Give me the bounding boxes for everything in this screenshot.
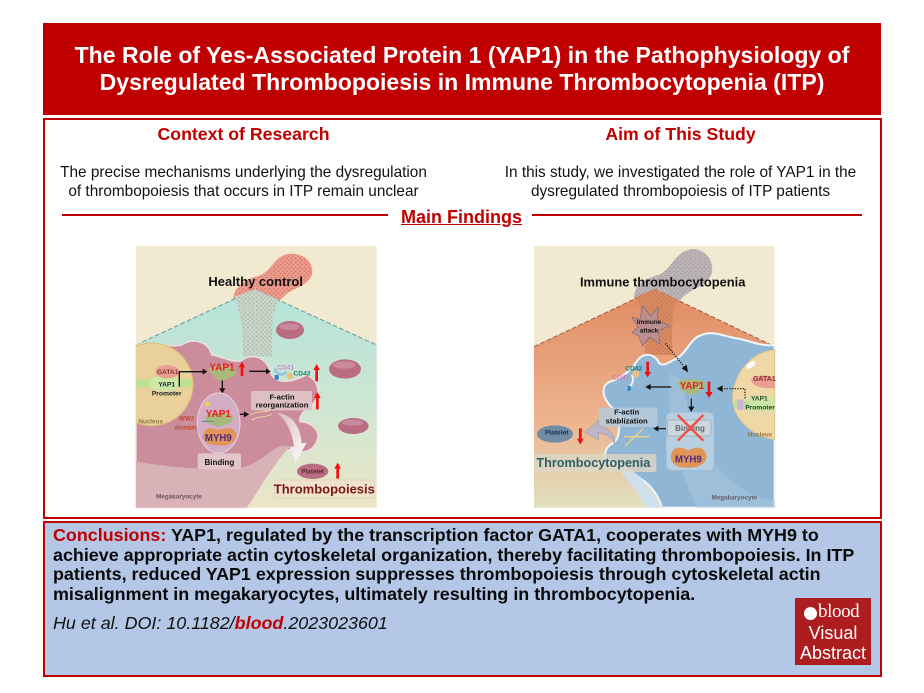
roof orange area bbox=[534, 289, 775, 508]
figure: immune thrombocytopenia diagram bbox=[534, 246, 776, 508]
arrows bbox=[179, 371, 267, 414]
megakaryocyte body bbox=[136, 341, 318, 508]
figure: healthy control diagram: WW2 bbox=[179, 415, 195, 422]
figure: immune thrombocytopenia diagram: stablization bbox=[606, 417, 648, 426]
figure: immune thrombocytopenia diagram: GATA1 bbox=[753, 376, 776, 383]
megakaryocyte blue body bbox=[604, 333, 775, 508]
promoter DNA: Promoter bbox=[152, 391, 182, 398]
figure: healthy control diagram: CD41 bbox=[277, 364, 294, 371]
figure: healthy control diagram: F-actin bbox=[269, 392, 295, 401]
logo: blood visual abstract bbox=[795, 598, 871, 665]
nucleus bbox=[733, 350, 775, 439]
arrow to platelet bbox=[585, 420, 615, 444]
figure: healthy control diagram: Megakaryocyte bbox=[156, 494, 202, 501]
heading: context of research: Context of Research bbox=[157, 124, 330, 144]
binding label bbox=[198, 453, 241, 469]
heading: main findings: Main Findings bbox=[401, 207, 522, 227]
platelets bbox=[276, 321, 369, 434]
roof teal area bbox=[136, 289, 377, 508]
logo: blood visual abstract: Abstract bbox=[800, 643, 866, 663]
text: conclusions paragraph: achieve appropriate actin cytoskeletal organization, thereby facilitating thrombopoiesis. In ITP bbox=[53, 545, 854, 565]
figure: healthy control diagram: YAP1 bbox=[206, 409, 231, 420]
figure: healthy control diagram bbox=[135, 246, 377, 508]
panel: main content frame bbox=[43, 118, 882, 519]
figure: healthy control diagram: reorganization bbox=[256, 401, 309, 410]
figure: immune thrombocytopenia diagram: Promoter bbox=[745, 404, 775, 411]
figure: immune thrombocytopenia diagram: F-actin bbox=[614, 408, 640, 417]
promoter DNA: GATA1 bbox=[157, 369, 179, 376]
platelet bbox=[297, 464, 328, 479]
thrombopoiesis label bbox=[274, 480, 374, 498]
figure: immune thrombocytopenia diagram: Megakaryocyte bbox=[711, 494, 758, 501]
figure: immune thrombocytopenia diagram: YAP1 bbox=[680, 381, 705, 392]
figure: healthy control diagram: Thrombopoiesis bbox=[274, 482, 375, 497]
dotted arrows bbox=[665, 343, 685, 368]
text: conclusions paragraph bbox=[53, 525, 854, 604]
promoter DNA bbox=[136, 365, 192, 398]
down arrows bbox=[577, 362, 713, 445]
text: aim body: dysregulated thrombopoiesis of ITP patients bbox=[531, 183, 830, 200]
vessel bbox=[234, 289, 278, 357]
text: context body: of thrombopoiesis that occurs in ITP remain unclear bbox=[68, 183, 419, 200]
CD41 CD42 bbox=[275, 368, 287, 374]
figure: immune thrombocytopenia diagram: CD42 bbox=[625, 366, 642, 373]
panel background bbox=[534, 246, 775, 508]
immune attack star bbox=[632, 306, 669, 346]
inner lighter band bbox=[669, 373, 775, 508]
panel background bbox=[136, 246, 377, 508]
figure: healthy control diagram: Platelet bbox=[301, 469, 325, 476]
binding oval bbox=[197, 393, 240, 453]
figure: immune thrombocytopenia diagram: Immune bbox=[637, 319, 662, 326]
title banner bbox=[43, 23, 881, 115]
panel: conclusions bbox=[43, 521, 882, 677]
text: context body bbox=[60, 164, 427, 200]
title text bbox=[74, 42, 850, 95]
solid arrows bbox=[650, 387, 691, 429]
figure: immune thrombocytopenia diagram: MYH9 bbox=[675, 455, 702, 466]
cell lower band bbox=[136, 445, 290, 508]
figure: immune thrombocytopenia diagram: Thrombocytopenia bbox=[536, 456, 651, 470]
vessel bbox=[636, 289, 677, 355]
text: conclusions paragraph: patients, reduced YAP1 expression suppresses thrombopoiesis through cytoskeletal actin bbox=[53, 564, 821, 584]
figure: immune thrombocytopenia diagram: YAP1 bbox=[751, 396, 768, 403]
logo: blood visual abstract: Visual bbox=[809, 623, 857, 643]
title text: Dysregulated Thrombopoiesis in Immune Thrombocytopenia (ITP) bbox=[100, 69, 824, 95]
text: aim body: In this study, we investigated the role of YAP1 in the bbox=[505, 164, 856, 181]
F-actin label bbox=[251, 391, 312, 410]
text: context body: The precise mechanisms underlying the dysregulation bbox=[60, 164, 427, 181]
binding box bbox=[666, 412, 714, 470]
CD receptors bbox=[627, 375, 633, 388]
logo: blood visual abstract: blood bbox=[818, 601, 859, 622]
figure: immune thrombocytopenia diagram: Platelet bbox=[545, 430, 569, 437]
label immune thrombocytopenia: Immune thrombocytopenia bbox=[580, 275, 746, 290]
text: citation: Hu et al. DOI: 10.1182/blood.2023023601 bbox=[53, 613, 388, 633]
text: conclusions paragraph: Conclusions: YAP1, regulated by the transcription factor GATA1, cooperates with MYH9 to bbox=[53, 525, 819, 545]
F-actin box bbox=[599, 408, 657, 427]
YAP1 top bbox=[208, 366, 237, 380]
bone marrow bbox=[233, 254, 312, 302]
thrombocytopenia label bbox=[534, 454, 656, 472]
YAP1 bbox=[677, 379, 706, 395]
bone marrow grey bbox=[634, 249, 712, 302]
figure: healthy control diagram: Nucleus bbox=[138, 419, 163, 426]
up arrows bbox=[239, 362, 341, 479]
figure: healthy control diagram: MYH9 bbox=[205, 433, 232, 444]
label healthy control: Healthy control bbox=[208, 274, 303, 289]
text: conclusions paragraph: misalignment in megakaryocytes, ultimately resulting in thrombocytopenia. bbox=[53, 584, 695, 604]
big white arrow bbox=[277, 413, 307, 463]
figure: immune thrombocytopenia diagram: CD41 bbox=[612, 374, 629, 381]
nucleus bbox=[136, 342, 194, 426]
figure: immune thrombocytopenia diagram: Nucleus bbox=[748, 431, 773, 438]
figure: immune thrombocytopenia diagram: attack bbox=[640, 327, 659, 334]
figure: healthy control diagram: CD42 bbox=[293, 370, 311, 377]
promoter DNA: YAP1 bbox=[158, 381, 175, 388]
title text: The Role of Yes-Associated Protein 1 (YAP1) in the Pathophysiology of bbox=[75, 42, 849, 68]
platelet bbox=[537, 425, 573, 443]
heading: aim of this study: Aim of This Study bbox=[605, 124, 756, 144]
figure: healthy control diagram: YAP1 bbox=[209, 362, 235, 373]
text: aim body bbox=[505, 164, 856, 200]
figure: healthy control diagram: Binding bbox=[204, 458, 234, 467]
figure: immune thrombocytopenia diagram: Binding bbox=[675, 424, 705, 433]
figure: healthy control diagram: domain bbox=[174, 424, 197, 431]
